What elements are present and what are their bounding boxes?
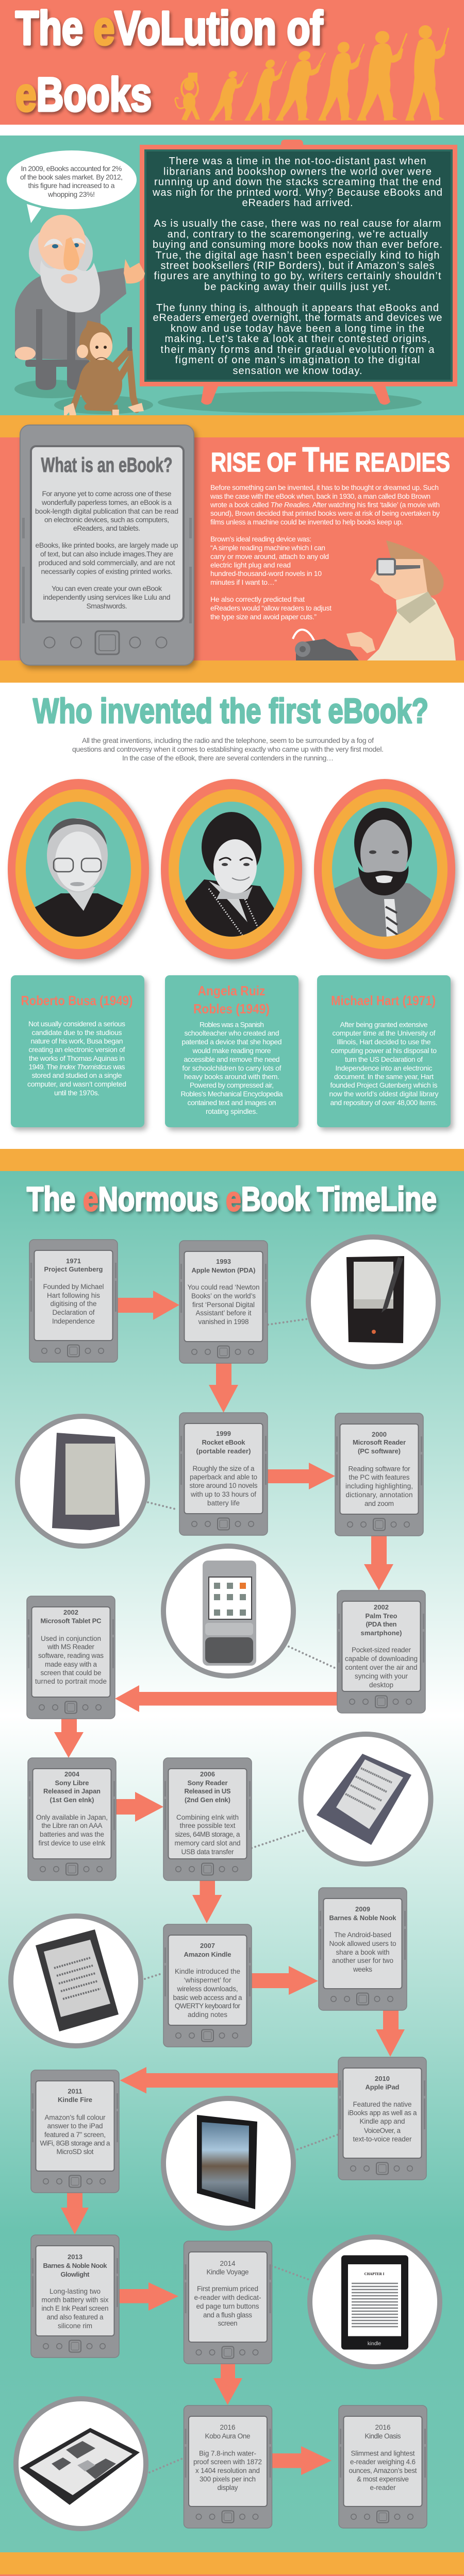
chalkboard text: be packing away their quills just yet.	[204, 281, 391, 293]
device: 1999 Rocket eBook: paperback and able to	[190, 1473, 257, 1481]
chalkboard text: There was a time in the not-too-distant past when	[169, 156, 426, 167]
text: Bob Brown story: hundred-thousand-word novels in 10	[210, 569, 322, 578]
device: 2016 Kobo Aura One: 2016	[220, 2424, 236, 2431]
device: 2004 Sony Libre: Released in Japan	[43, 1787, 101, 1795]
device: 2006 Sony Reader: Combining eInk with	[176, 1814, 239, 1821]
photo: Sony Reader	[301, 1734, 431, 1864]
card text: Not usually considered a serious	[28, 1020, 125, 1028]
device: 2013 Nook Glowlight	[31, 2235, 119, 2358]
device: 2016 Kobo Aura One: display	[218, 2484, 238, 2492]
card: Roberto Busa	[11, 975, 144, 1127]
card text: Independence into an electronic	[335, 1064, 432, 1072]
text: eBook definition: book-length digital publication that can be read	[35, 507, 178, 515]
device: 2014 Kindle Voyage: screen	[218, 2319, 237, 2327]
card text: nature of his work, Busa began	[31, 1037, 123, 1045]
device: 2004 Sony Libre	[28, 1758, 116, 1880]
device: 1993 Apple Newton: Assistant’ before it	[196, 1309, 252, 1317]
device: 1993 Apple Newton: Books’ on the world’s	[191, 1292, 256, 1300]
device: 2016 Kobo Aura One: 300 pixels per inch	[200, 2475, 256, 2483]
chalkboard text: librarians and bookshop owners the world over were	[163, 166, 432, 177]
device: 2013 Nook Glowlight: month battery with six	[41, 2296, 109, 2304]
text: inventors intro: questions and controversy when it comes to establishing exactly who came up with the very first model.	[72, 745, 384, 753]
character: old Darwin pointing	[14, 215, 145, 398]
text: eBook definition: produced and sold commercially, and are not	[38, 558, 175, 567]
device: 2002 Palm Treo: syncing with your	[355, 1672, 408, 1680]
chalkboard text: buying and consuming more books now than ever before.	[153, 239, 442, 250]
card: Angela Ruiz Robles	[165, 975, 299, 1127]
device: 2016 Kindle Oasis: Slimmest and lightest	[351, 2449, 415, 2458]
device: 2010 Apple iPad: Apple iPad	[365, 2083, 400, 2091]
device: 1999 Rocket eBook	[179, 1413, 268, 1535]
device: 2014 Kindle Voyage: Kindle Voyage	[206, 2268, 248, 2276]
panel: timeline gradient background	[0, 1171, 464, 2552]
text: Bob Brown story: eReaders would “allow readers to adjust	[210, 604, 332, 612]
device: 2009 Barnes and Noble Nook: weeks	[353, 1965, 372, 1973]
panel: eInk explained background	[0, 2574, 464, 2576]
device: 2014 Kindle Voyage: ed page turn buttons	[196, 2302, 259, 2310]
device: 2007 Amazon Kindle: ‘whispernet’ for	[184, 1976, 231, 1984]
device: 2002 Microsoft Tablet PC: Used in conjunction	[41, 1635, 101, 1642]
card text: heavy books around with them.	[184, 1073, 279, 1081]
panel: orange band below timeline	[0, 2552, 464, 2574]
card text: computing power at his disposal to	[331, 1046, 437, 1055]
device: 1971 Project Gutenberg	[29, 1240, 118, 1362]
photo: Rocket eBook	[18, 1416, 147, 1546]
text: eBook definition: For anyone yet to come across one of these	[42, 489, 172, 498]
device: 2016 Kobo Aura One: Kobo Aura One	[205, 2432, 251, 2440]
device: 2004 Sony Libre: first device to use eInk	[38, 1839, 106, 1847]
text: eBook definition: on electronic devices, such as computers,	[44, 515, 169, 523]
device: 2016 Kobo Aura One: x 1404 resolution and	[195, 2467, 260, 2475]
device: 2016 Kindle Oasis: 2016	[375, 2424, 391, 2431]
device: 2011 Kindle Fire: MicroSD slot	[57, 2148, 94, 2156]
device: 2016 Kobo Aura One	[184, 2405, 272, 2528]
panel: orange band above timeline	[0, 1149, 464, 1171]
text: eBook definition: necessarily copies of existing printed works.	[41, 567, 172, 575]
device: 2002 Microsoft Tablet PC: software, reading was	[38, 1652, 104, 1659]
text: Bob Brown story: wrote a book called The Readies. After watching his first ‘talkie’ (a movie with	[210, 501, 440, 509]
device: 1993 Apple Newton: You could read ‘Newton	[188, 1283, 260, 1291]
chalkboard text: running up and down the stacks screaming that the end	[154, 177, 441, 188]
bubble text: of the book sales market. By 2012,	[20, 173, 123, 181]
device: 2002 Microsoft Tablet PC: Microsoft Tablet PC	[40, 1617, 102, 1625]
device: 2002 Microsoft Tablet PC: made easy with a	[45, 1660, 97, 1668]
device: 2010 Apple iPad: Featured the native	[353, 2100, 411, 2108]
chalkboard text: eReaders had arrived.	[242, 197, 353, 209]
device: 2002 Palm Treo: Pocket-sized reader	[352, 1646, 411, 1654]
device: 2010 Apple iPad	[338, 2057, 426, 2180]
card text: patented a device that she hoped	[181, 1038, 281, 1046]
device: 2011 Kindle Fire: WiFi, 8GB storage and a	[40, 2139, 110, 2147]
card text: Illinois, Hart decided to use the	[337, 1038, 431, 1046]
device: 2000 Microsoft Reader: including highlighting,	[345, 1482, 413, 1490]
device: 1993 Apple Newton	[179, 1241, 268, 1363]
text: Bob Brown story: films unless a machine could be invented to help books keep up.	[210, 518, 403, 526]
text: eBook definition	[35, 489, 178, 610]
chalkboard text: figures are anything to go by, writers certainly shouldn’t	[154, 270, 441, 282]
text: Bob Brown story: was the case with the eBook when, back in 1930, a man called Bob Brown	[210, 492, 430, 500]
speech bubble	[7, 150, 137, 223]
device: 2000 Microsoft Reader: (PC software)	[358, 1447, 401, 1455]
device: 2016 Kindle Oasis: Kindle Oasis	[365, 2432, 401, 2440]
text: eBook definition: eBooks, like printed books, are largely made up	[35, 541, 178, 549]
card text: founded Project Gutenberg which is	[330, 1081, 437, 1089]
device: 2006 Sony Reader: three possible text	[179, 1822, 236, 1829]
arrows: timeline flow	[54, 1291, 405, 2475]
device: 2000 Microsoft Reader: 2000	[372, 1430, 387, 1438]
device: 1999 Rocket eBook: Roughly the size of a	[193, 1465, 255, 1472]
device: 2013 Nook Glowlight: 2013	[68, 2253, 82, 2261]
card title: Roberto Busa (1949)	[21, 993, 133, 1008]
title line one: The eVoLution of	[15, 2, 323, 55]
connectors: dotted lines to device photos	[145, 1319, 338, 2472]
text: Bob Brown story: the type size and avoid paper cuts.”	[210, 613, 317, 621]
text: eBook definition: wonderfully paperless tomes, an eBook is a	[41, 498, 172, 506]
device: 2002 Palm Treo: (PDA then	[366, 1620, 397, 1628]
device: 2007 Amazon Kindle: 2007	[200, 1942, 215, 1950]
device: 2009 Barnes and Noble Nook	[319, 1888, 407, 2010]
device: 2014 Kindle Voyage: and a flush glass	[203, 2311, 252, 2319]
device: 2010 Apple iPad: iBooks app as well as a	[347, 2109, 417, 2117]
card title: Angela Ruiz	[198, 983, 265, 998]
card text: accessible and remove the need	[184, 1055, 279, 1063]
device: 1971 Project Gutenberg: Founded by Michael	[43, 1283, 104, 1291]
text: Bob Brown story: carry or move around, attach to any old	[210, 552, 329, 561]
heading: what is an eBook: What is an eBook?	[41, 454, 172, 477]
card text	[329, 1020, 438, 1107]
device: 2004 Sony Libre: the Libre ran on AAA	[41, 1822, 102, 1829]
device: 2006 Sony Reader: USB data transfer	[181, 1848, 234, 1856]
card text: and repository of over 48,000 items.	[330, 1098, 437, 1107]
bubble text: In 2009, eBooks accounted for 2%	[21, 164, 122, 173]
device: 2011 Kindle Fire: featured a 7” screen,	[44, 2131, 106, 2139]
device: 2002 Palm Treo: 2002	[374, 1603, 389, 1611]
device: 2004 Sony Libre: (1st Gen eInk)	[49, 1796, 94, 1804]
device: 2006 Sony Reader: sizes, 64MB storage, a	[175, 1831, 240, 1838]
text: inventors intro	[72, 736, 384, 762]
device: 2002 Palm Treo: smartphone)	[361, 1629, 402, 1637]
device: 2013 Nook Glowlight: inch E Ink Pearl screen	[41, 2304, 108, 2312]
device: 2009 Barnes and Noble Nook: Nook allowed users to	[329, 1940, 396, 1947]
device: 1971 Project Gutenberg: Hart following his	[47, 1292, 100, 1299]
device: 1999 Rocket eBook: Rocket eBook	[202, 1438, 245, 1446]
card text: rotating spindles.	[206, 1107, 258, 1115]
text: eBook definition: of text, but can also include images.They are	[40, 550, 173, 558]
text: inventors intro: All the great inventions, including the radio and the telephone, seem to be surrounded by a fog of	[82, 736, 374, 744]
chalkboard text: and, contrary to the scaremongering, we’re actually	[167, 229, 428, 240]
device: 2010 Apple iPad: VoiceOver, a	[364, 2127, 401, 2134]
device: 2011 Kindle Fire	[31, 2070, 119, 2193]
text: eBook definition: You can even create your own eBook	[52, 584, 162, 592]
card text: 1949. The Index Thomisticus was	[29, 1062, 125, 1071]
device: 2011 Kindle Fire: 2011	[68, 2088, 82, 2095]
chalkboard text: their many forms and their gradual evolution from a	[161, 344, 435, 355]
character: sad monkey with eReader	[54, 320, 153, 422]
text: Bob Brown story	[210, 483, 440, 621]
device: 2002 Palm Treo	[337, 1590, 425, 1713]
large eReader: what is an eBook	[20, 425, 194, 665]
photo: Kobo Aura One	[16, 2399, 146, 2529]
device: 2016 Kobo Aura One: Big 7.8-inch water-	[199, 2449, 256, 2458]
device: 2007 Amazon Kindle: adding notes	[188, 2011, 227, 2019]
device: 2002 Palm Treo: capable of downloading	[345, 1655, 418, 1663]
card text: computer time at the University of	[332, 1029, 436, 1037]
text: eBook definition: independently using services like Lulu and	[43, 593, 170, 601]
device: 2002 Palm Treo: Palm Treo	[365, 1612, 397, 1620]
chalkboard	[140, 140, 457, 413]
chalkboard text: know and use today have been a long time in the	[171, 323, 424, 334]
device: 2016 Kindle Oasis: e-reader weighing 4.6	[350, 2458, 416, 2466]
photo: Amazon Kindle	[11, 1916, 141, 2046]
device: 2014 Kindle Voyage	[184, 2241, 272, 2364]
device: 2002 Palm Treo: content over the air and	[345, 1664, 418, 1671]
device: 2010 Apple iPad: 2010	[375, 2075, 390, 2082]
panel: teal introduction background	[0, 135, 464, 415]
card text: now the world’s oldest digital library	[329, 1090, 438, 1098]
device: 1999 Rocket eBook: with up to 33 hours of	[190, 1490, 256, 1498]
bubble text: this figure had increased to a	[28, 181, 115, 190]
device: 2016 Kindle Oasis: e-reader	[370, 2484, 396, 2492]
portrait: Roberto Busa	[8, 779, 149, 959]
photo: Kindle Voyage: kindle	[368, 2341, 381, 2347]
device: 2000 Microsoft Reader: Microsoft Reader	[353, 1438, 406, 1446]
device: 2007 Amazon Kindle: basic web access and a	[173, 1994, 242, 2002]
device: 2009 Barnes and Noble Nook: Barnes & Noble Nook	[329, 1914, 396, 1922]
device: 2011 Kindle Fire: Amazon’s full colour	[44, 2113, 106, 2122]
device: 1971 Project Gutenberg: Project Gutenberg	[44, 1265, 103, 1273]
device: 2002 Microsoft Tablet PC: 2002	[63, 1608, 78, 1616]
chalkboard text	[152, 156, 442, 377]
card text: Powered by compressed air,	[190, 1081, 274, 1089]
device: 2014 Kindle Voyage: e-reader with dedicat-	[194, 2294, 261, 2301]
title	[15, 2, 323, 121]
device: 2013 Nook Glowlight: and also featured a	[46, 2313, 104, 2321]
photo: Apple iPad	[163, 2098, 293, 2228]
card text	[180, 1020, 283, 1115]
device: 2000 Microsoft Reader: dictionary, annotation	[345, 1491, 412, 1499]
device: 2000 Microsoft Reader: Reading software for	[349, 1465, 410, 1472]
device: 2006 Sony Reader: Released in US	[185, 1787, 231, 1795]
device: 1993 Apple Newton: vanished in 1998	[198, 1318, 248, 1326]
card text: Robles’s Mechanical Encyclopedia	[180, 1090, 283, 1098]
icon: evolution of man silhouettes	[175, 25, 449, 121]
device: 2002 Microsoft Tablet PC: with MS Reader	[47, 1643, 95, 1651]
device: 2011 Kindle Fire: Kindle Fire	[58, 2096, 92, 2104]
device: 2009 Barnes and Noble Nook: 2009	[355, 1905, 370, 1913]
device: 2010 Apple iPad: text-to-voice reader	[353, 2135, 412, 2143]
chalkboard text: True, the digital age hasn’t been especially kind to high	[156, 250, 439, 261]
portrait: Michael Hart	[314, 779, 455, 959]
text: Bob Brown story: sound), Brown decided that printed books were at risk of being overtaken by	[210, 509, 440, 517]
text: eBook definition: Smashwords.	[87, 602, 127, 610]
device: 1999 Rocket eBook: 1999	[216, 1430, 231, 1437]
device: 2007 Amazon Kindle: Kindle introduced the	[175, 1968, 240, 1975]
text: Bob Brown story: “A simple reading machine which I can	[210, 544, 325, 552]
card text: candidate due to the studious	[32, 1028, 122, 1037]
device: 1971 Project Gutenberg: digitising of the	[51, 1300, 97, 1308]
device: 2006 Sony Reader: (2nd Gen eInk)	[185, 1796, 230, 1804]
text: Bob Brown story: electric light plug and read	[210, 561, 291, 569]
device: 2006 Sony Reader: 2006	[200, 1770, 215, 1778]
device: 2006 Sony Reader: memory card slot and	[174, 1839, 240, 1847]
text: Bob Brown story: He also correctly predicted that	[210, 595, 305, 603]
card text: creating an electronic version of	[29, 1045, 125, 1054]
device: 2007 Amazon Kindle: QWERTY keyboard for	[175, 2002, 240, 2010]
device: 2013 Nook Glowlight: Barnes & Noble Nook	[43, 2262, 107, 2269]
card text: would make reading more	[192, 1046, 271, 1055]
device: 1999 Rocket eBook: store around 10 novels	[190, 1482, 258, 1489]
portrait: Angela Ruiz Robles	[161, 779, 302, 959]
device: 1993 Apple Newton: 1993	[216, 1258, 231, 1265]
text: Bob Brown story: Brown’s ideal reading device was:	[210, 535, 311, 543]
card text: turn the US Declaration of	[345, 1055, 423, 1063]
card text	[27, 1020, 126, 1097]
chalkboard text: making. Let’s take a look at their contested origins,	[165, 333, 430, 345]
device: 2004 Sony Libre: 2004	[64, 1770, 80, 1778]
device: 1971 Project Gutenberg: 1971	[66, 1257, 81, 1265]
chalkboard text: street booksellers (RIP Borders), but if Amazon’s sales	[161, 260, 434, 272]
device: 2007 Amazon Kindle: Amazon Kindle	[184, 1951, 231, 1958]
panel: header background	[0, 0, 464, 125]
chalkboard text: sensation we know today.	[233, 365, 362, 377]
device: 2007 Amazon Kindle: wireless downloads,	[176, 1985, 238, 1993]
card text: Robles was a Spanish	[200, 1020, 264, 1028]
card text: schoolteacher who created and	[185, 1029, 279, 1037]
device: 1971 Project Gutenberg: Independence	[52, 1317, 95, 1325]
chalkboard text: The funny thing is, although it appears that eBooks and	[156, 302, 439, 314]
device: 1999 Rocket eBook: battery life	[207, 1499, 240, 1507]
device: 2002 Palm Treo: desktop	[369, 1681, 393, 1689]
card title: Robles (1949)	[193, 1001, 270, 1016]
device: 2009 Barnes and Noble Nook: another user for two	[332, 1957, 393, 1964]
device: 1993 Apple Newton: first ‘Personal Digital	[192, 1301, 255, 1309]
device: 2013 Nook Glowlight: Long-lasting two	[49, 2287, 101, 2295]
card: Michael Hart	[317, 975, 451, 1127]
device: 2009 Barnes and Noble Nook: share a book with	[336, 1948, 390, 1956]
device: 2002 Microsoft Tablet PC: turned to portrait mode	[35, 1677, 107, 1685]
text: inventors intro: In the case of the eBook, there are several contenders in the running…	[122, 754, 334, 762]
card title: Michael Hart (1971)	[331, 993, 436, 1008]
device: 2000 Microsoft Reader: and zoom	[364, 1500, 394, 1507]
title line two: eBooks	[15, 69, 152, 121]
device: 2016 Kindle Oasis: ounces, Amazon’s best	[349, 2467, 417, 2475]
chalkboard text: As is usually the case, there was no real cause for alarm	[154, 218, 441, 229]
panel: orange band with coral section	[0, 415, 464, 683]
card text: until the 1970s.	[54, 1089, 100, 1097]
device: 2004 Sony Libre: Only available in Japan,	[36, 1814, 108, 1821]
device: 2016 Kobo Aura One: proof screen with 1872	[193, 2458, 262, 2466]
device: 2013 Nook Glowlight: silicone rim	[58, 2322, 92, 2330]
card text: After being granted extensive	[340, 1020, 428, 1028]
card text: for schoolchildren to carry lots of	[183, 1064, 281, 1072]
device: 2014 Kindle Voyage: 2014	[220, 2260, 236, 2267]
device: 2014 Kindle Voyage: First premium priced	[197, 2285, 258, 2293]
card text: document. In the same year, Hart	[334, 1073, 434, 1081]
device: 2006 Sony Reader: Sony Reader	[188, 1779, 228, 1787]
chalkboard text: eReaders emerged overnight, the formats and devices we	[153, 312, 442, 324]
text: eBook definition: eReaders, and tablets.	[73, 524, 140, 532]
device: 1993 Apple Newton: Apple Newton (PDA)	[192, 1266, 256, 1274]
card text: contained text and images on	[188, 1098, 276, 1107]
device: 2013 Nook Glowlight: Glowlight	[61, 2270, 90, 2278]
device: 2011 Kindle Fire: answer to the iPad	[47, 2122, 103, 2130]
text: Bob Brown story: minutes if I want to…”	[210, 578, 277, 586]
device: 1999 Rocket eBook: (portable reader)	[196, 1447, 251, 1455]
chalkboard text: figment of one man’s imagination to the digital	[175, 354, 420, 366]
device: 2002 Microsoft Tablet PC: screen that could be	[40, 1669, 101, 1676]
device: 2006 Sony Reader	[163, 1758, 252, 1880]
device: 2010 Apple iPad: Kindle app and	[360, 2117, 405, 2125]
photo: Kindle Voyage	[310, 2237, 440, 2367]
text: Bob Brown story: Before something can be invented, it has to be thought or dreamed up. Such	[210, 483, 439, 492]
card text: the works of Thomas Aquinas in	[29, 1054, 125, 1062]
photo: Palm Treo	[163, 1546, 293, 1676]
device: 2004 Sony Libre: batteries and was the	[40, 1831, 104, 1838]
chalkboard text: was nigh for the printed word. Why? Because eBooks and	[152, 187, 442, 198]
device: 2004 Sony Libre: Sony Libre	[55, 1779, 89, 1787]
card title	[193, 983, 270, 1016]
photo: Apple Newton	[308, 1237, 438, 1367]
photo: Kindle Voyage: CHAPTER I	[364, 2272, 385, 2276]
device: 1971 Project Gutenberg: Declaration of	[53, 1309, 95, 1316]
card text: stored and studied on a single	[32, 1071, 122, 1079]
device: 2002 Microsoft Tablet PC	[27, 1596, 115, 1719]
device: 2009 Barnes and Noble Nook: The Android-based	[334, 1931, 391, 1939]
character: Bob Brown at typewriter	[293, 540, 456, 660]
device: 2016 Kindle Oasis	[339, 2405, 427, 2528]
device: 2007 Amazon Kindle	[163, 1924, 252, 2047]
card text: computer, and wasn’t completed	[27, 1080, 126, 1088]
bubble text: whopping 23%!	[47, 190, 95, 198]
device: 2000 Microsoft Reader	[335, 1413, 423, 1536]
device: 2016 Kindle Oasis: & most expensive	[357, 2475, 409, 2483]
device: 2000 Microsoft Reader: the PC with features	[349, 1473, 410, 1481]
bubble text	[20, 164, 123, 198]
